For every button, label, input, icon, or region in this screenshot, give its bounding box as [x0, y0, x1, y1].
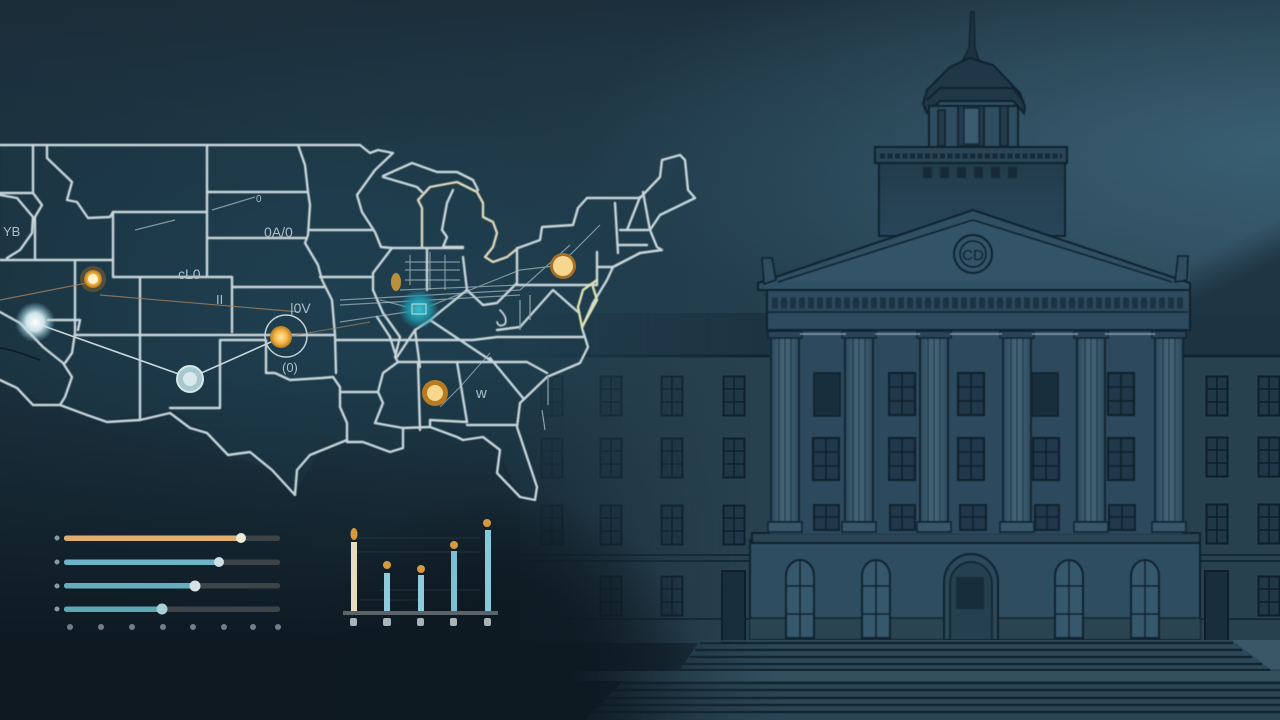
left fade over wing base — [300, 490, 700, 720]
spire — [963, 12, 979, 60]
map: location markers — [15, 253, 576, 406]
slider bars — [54, 533, 281, 630]
axis markers — [350, 618, 491, 626]
slider 3 — [54, 580, 280, 592]
upper flight — [680, 640, 1270, 670]
marker: gold small — [391, 273, 401, 291]
acroterion left — [762, 258, 776, 284]
marker: teal hub — [399, 289, 439, 329]
building: columns — [768, 331, 1186, 532]
building: central tower and cupola — [875, 12, 1067, 236]
map: small labels: 0A/0 — [264, 224, 293, 240]
map: small labels — [3, 194, 487, 402]
bars — [351, 542, 357, 613]
map: south-west border — [0, 312, 347, 495]
lower flight — [609, 681, 850, 720]
tower small windows — [923, 167, 1017, 178]
marker: gold south — [422, 380, 448, 406]
slider 1 — [54, 533, 280, 543]
medallion: CD — [962, 247, 984, 264]
slider 4 — [54, 604, 280, 614]
marker: pale circle — [177, 366, 203, 392]
map: great lakes — [383, 163, 478, 192]
acroterion right — [1175, 256, 1188, 282]
wing roof band — [664, 313, 1190, 354]
wing walls — [520, 357, 1280, 643]
map: north and west border — [0, 145, 393, 248]
map: small labels: |0V — [290, 300, 311, 316]
arched door — [944, 554, 998, 640]
map: small labels: 0 — [256, 194, 262, 205]
landing — [560, 671, 1280, 681]
marker: white glow — [15, 302, 55, 342]
map: small labels: II — [216, 292, 223, 307]
map: western state lines — [0, 145, 207, 363]
marker: gold northeast — [550, 253, 576, 279]
arched windows — [786, 560, 814, 638]
map: small labels: (0) — [282, 360, 298, 375]
bar caps — [350, 519, 491, 573]
cupola dome — [923, 58, 1025, 113]
map: small labels: w — [475, 385, 487, 402]
map: north-east border — [333, 155, 695, 500]
map: small labels: cL0 — [178, 266, 201, 282]
bar chart — [343, 519, 498, 626]
tower cornice — [875, 147, 1067, 163]
building: pediment and entablature — [758, 210, 1190, 334]
slider axis dots — [67, 624, 281, 630]
map: thin connector lines — [0, 197, 600, 430]
building: dark roof shadow behind right wing — [1190, 200, 1280, 357]
building: portico wall and windows — [770, 330, 1182, 534]
chart grid — [350, 538, 480, 600]
building: rear wings — [520, 313, 1280, 643]
marker: gold west — [80, 266, 106, 292]
wing windows — [542, 376, 1280, 643]
building: lower block — [750, 533, 1200, 640]
map: eastern state lines — [373, 248, 403, 428]
chart axis — [343, 611, 498, 615]
tower block — [879, 160, 1065, 236]
medallion — [954, 235, 992, 273]
slider 2 — [54, 557, 280, 567]
right ground — [1232, 640, 1280, 669]
map: small labels: YB — [3, 224, 20, 239]
marker: gold ring center — [265, 315, 307, 357]
US map — [0, 145, 695, 500]
map: land tint — [0, 145, 695, 500]
cupola drum — [929, 106, 1018, 147]
building: front steps — [560, 640, 1280, 720]
